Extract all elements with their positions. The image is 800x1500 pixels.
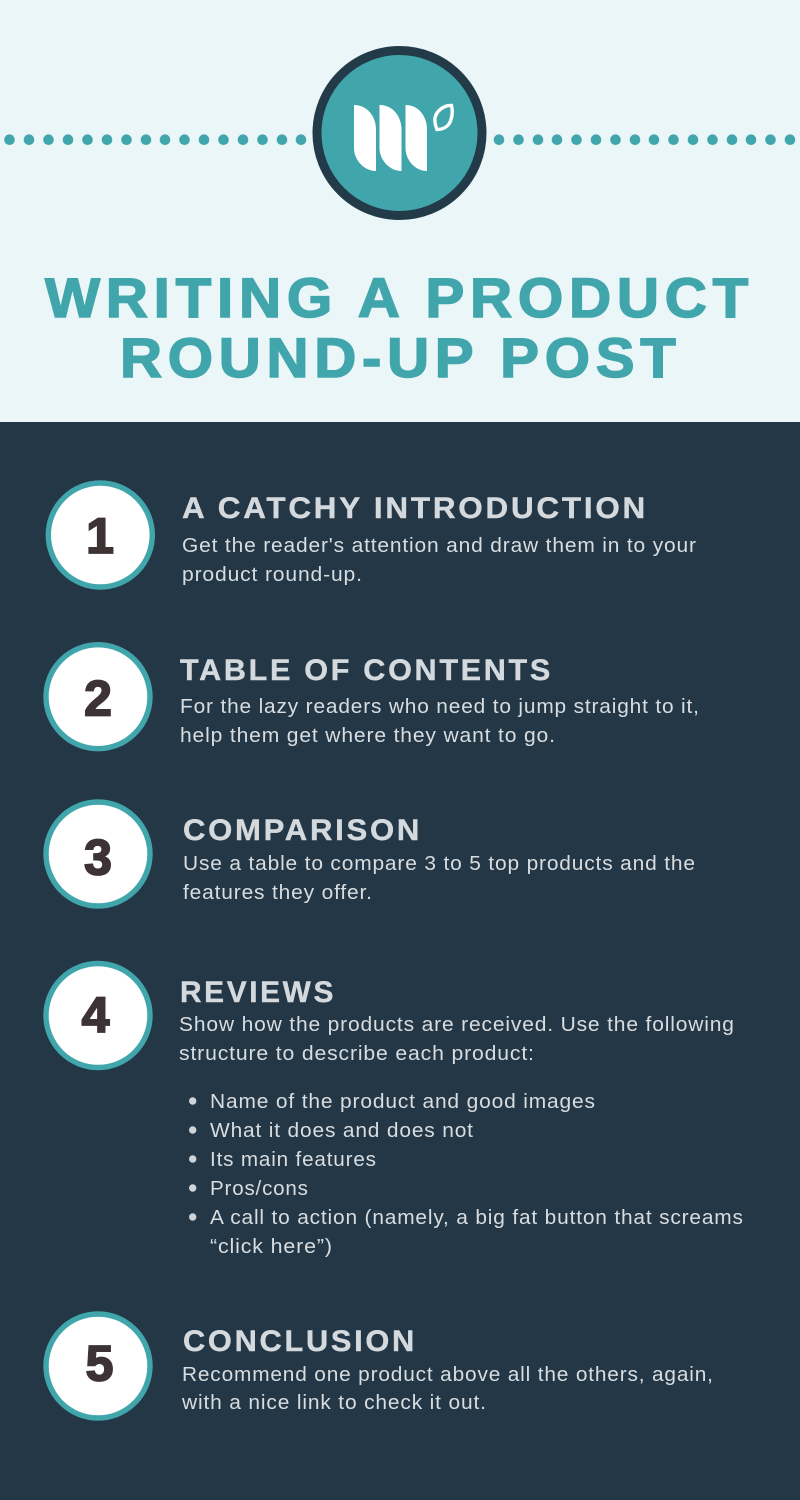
right dotted line (494, 134, 795, 145)
step 4 heading: REVIEWS (180, 976, 336, 1009)
step 1 number badge: 1 (86, 508, 114, 564)
step 5 heading: CONCLUSION (183, 1325, 417, 1358)
step 5 body (181, 1364, 714, 1414)
step 2 body: help them get where they want to go. (180, 725, 556, 747)
title (45, 266, 754, 389)
step 3 number badge (46, 802, 150, 906)
step 4 bullet list: “click here”) (210, 1236, 333, 1258)
step 4 bullet list: Its main features (210, 1149, 377, 1171)
step 2 heading: TABLE OF CONTENTS (180, 654, 553, 687)
left dotted line (4, 134, 306, 145)
header background panel (0, 0, 800, 422)
icon: logo badge (317, 50, 482, 216)
step 1 body: product round-up. (182, 564, 363, 586)
step 4 body: Show how the products are received. Use the following (179, 1014, 735, 1036)
step 3 number badge: 3 (84, 830, 112, 886)
step 1 body: Get the reader's attention and draw them in to your (182, 535, 697, 557)
step 5 body: with a nice link to check it out. (181, 1392, 487, 1414)
step 5 body: Recommend one product above all the others, again, (182, 1364, 714, 1386)
step 2 number badge (46, 645, 150, 749)
step 2 number badge: 2 (84, 670, 112, 726)
step 4 bullet list: Name of the product and good images (210, 1091, 596, 1113)
step 5 number badge: 5 (86, 1336, 113, 1392)
step 3 body (183, 853, 696, 904)
step 5 number badge (46, 1314, 150, 1418)
step 4 bullet list (189, 1091, 744, 1258)
step 4 body (179, 1014, 735, 1065)
step 4: reviews (46, 964, 744, 1258)
step 5: conclusion (46, 1314, 714, 1418)
step 3: comparison (46, 802, 696, 906)
step 4 number badge (46, 964, 150, 1068)
step 2: table of contents (46, 645, 700, 749)
step 4 bullet list: A call to action (namely, a big fat button that screams (210, 1207, 744, 1229)
step 2 body (180, 696, 700, 747)
step 4 body: structure to describe each product: (179, 1043, 535, 1065)
step 3 body: features they offer. (183, 882, 373, 904)
step 4 bullet list: Pros/cons (210, 1178, 309, 1200)
step 2 body: For the lazy readers who need to jump straight to it, (180, 696, 700, 718)
step 1: a catchy introduction (48, 483, 697, 587)
step 3 heading: COMPARISON (183, 814, 422, 847)
step 1 heading: A CATCHY INTRODUCTION (182, 492, 648, 525)
step 3 body: Use a table to compare 3 to 5 top products and the (183, 853, 696, 875)
title: ROUND-UP POST (120, 326, 682, 389)
step 4 number badge: 4 (82, 987, 110, 1043)
step 1 number badge (48, 483, 152, 587)
title: WRITING A PRODUCT (45, 266, 754, 329)
step 1 body (182, 535, 697, 586)
dark content panel (0, 422, 800, 1500)
step 4 bullet list: What it does and does not (210, 1120, 474, 1142)
